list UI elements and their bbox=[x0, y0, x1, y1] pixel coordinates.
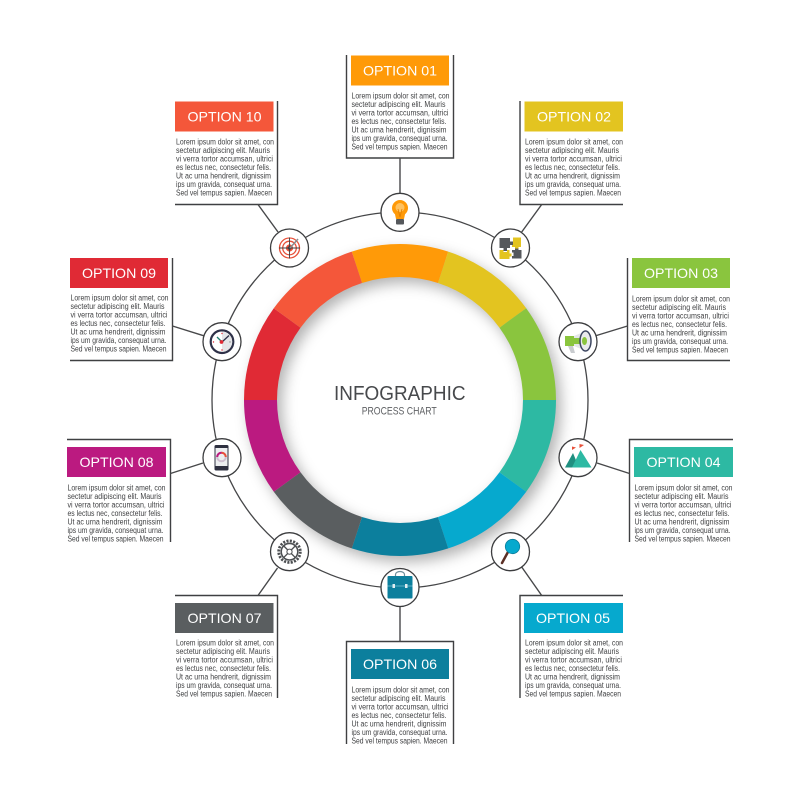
panel: option 06: Lorem ipsum dolor sit amet, con bbox=[352, 686, 450, 694]
panel: option 09: es lectus nec, consectetur felis. bbox=[70, 319, 166, 328]
panel: option 02: Ut ac urna hendrerit, dignissim bbox=[525, 172, 620, 180]
panel: option 02: Sed vel tempus sapien. Maecen bbox=[525, 188, 621, 198]
panel: option 04: Sed vel tempus sapien. Maecen bbox=[634, 534, 730, 544]
panel: option 03: Ut ac urna hendrerit, dignissim bbox=[632, 328, 727, 338]
panel: option 05: Ut ac urna hendrerit, dignissim bbox=[525, 672, 620, 682]
panel: option 05: sectetur adipiscing elit. Mauris bbox=[525, 647, 619, 656]
panel: option 04: vi verra tortor accumsan, ultrici bbox=[634, 500, 732, 510]
panel: option 07: OPTION 07 bbox=[188, 610, 262, 626]
panel: option 07: vi verra tortor accumsan, ultrici bbox=[176, 656, 273, 664]
centre subtitle: PROCESS CHART bbox=[362, 406, 437, 418]
panel: option 04 bbox=[597, 440, 733, 544]
panel: option 02: ips um gravida, consequat urna. bbox=[525, 180, 621, 189]
panel: option 08: OPTION 08 bbox=[80, 454, 154, 470]
ring drop shadow bbox=[266, 266, 544, 546]
panel: option 03: Lorem ipsum dolor sit amet, con bbox=[632, 294, 730, 304]
panel: option 08: es lectus nec, consectetur felis. bbox=[68, 509, 162, 518]
panel: option 02: Lorem ipsum dolor sit amet, con bbox=[525, 138, 623, 146]
panel: option 08: sectetur adipiscing elit. Mauris bbox=[68, 492, 162, 501]
panel: option 10: vi verra tortor accumsan, ultrici bbox=[176, 154, 273, 164]
panel: option 02: sectetur adipiscing elit. Mauris bbox=[525, 146, 619, 155]
panel: option 04: Ut ac urna hendrerit, dignissim bbox=[634, 518, 730, 526]
icon: puzzle bbox=[492, 229, 530, 267]
panel: option 07: ips um gravida, consequat urna. bbox=[176, 681, 272, 690]
panel: option 09: sectetur adipiscing elit. Mauris bbox=[70, 302, 165, 311]
panel: option 07: Sed vel tempus sapien. Maecen bbox=[176, 690, 272, 698]
panel: option 09: Lorem ipsum dolor sit amet, con bbox=[70, 294, 168, 302]
panel: option 04: sectetur adipiscing elit. Mauris bbox=[634, 492, 729, 501]
icon: light bulb bbox=[381, 193, 419, 231]
panel: option 05: es lectus nec, consectetur felis. bbox=[525, 664, 620, 673]
outer thin orbit circle bbox=[212, 212, 588, 588]
panel: option 05: OPTION 05 bbox=[536, 610, 610, 626]
panel: option 05: Sed vel tempus sapien. Maecen bbox=[525, 690, 621, 698]
panel: option 06: es lectus nec, consectetur felis. bbox=[352, 711, 446, 720]
icon: smartphone bbox=[203, 439, 241, 477]
panel: option 02: vi verra tortor accumsan, ultrici bbox=[525, 154, 622, 164]
panel: option 07: Ut ac urna hendrerit, dignissim bbox=[176, 672, 271, 682]
icon: briefcase bbox=[381, 568, 419, 606]
panel: option 10 bbox=[175, 101, 278, 232]
panel: option 01: ips um gravida, consequat urna. bbox=[352, 134, 448, 143]
panel: option 01: vi verra tortor accumsan, ultrici bbox=[352, 108, 449, 118]
panel: option 10: sectetur adipiscing elit. Mauris bbox=[176, 146, 270, 155]
panel: option 01: Ut ac urna hendrerit, dignissim bbox=[352, 126, 447, 134]
panel: option 07: sectetur adipiscing elit. Mauris bbox=[176, 647, 270, 656]
panel: option 08 bbox=[67, 440, 203, 544]
panel: option 03: ips um gravida, consequat urna. bbox=[632, 337, 728, 346]
panel: option 02: es lectus nec, consectetur felis. bbox=[525, 163, 620, 172]
panel: option 09: Ut ac urna hendrerit, dignissim bbox=[70, 328, 166, 336]
panel: option 01 bbox=[346, 55, 454, 193]
panel: option 06 bbox=[346, 607, 454, 746]
panel: option 08: Sed vel tempus sapien. Maecen bbox=[68, 534, 164, 544]
panel: option 09: OPTION 09 bbox=[82, 265, 156, 281]
icon: megaphone bbox=[559, 323, 597, 361]
panel: option 09: vi verra tortor accumsan, ultrici bbox=[70, 310, 168, 320]
panel: option 07: es lectus nec, consectetur felis. bbox=[176, 664, 271, 673]
panel: option 05: ips um gravida, consequat urna. bbox=[525, 681, 621, 690]
panel: option 05 bbox=[520, 567, 623, 698]
segmented colour ring bbox=[244, 244, 556, 556]
panel: option 04: ips um gravida, consequat urna. bbox=[634, 526, 730, 535]
panel: option 03: Sed vel tempus sapien. Maecen bbox=[632, 346, 728, 354]
panel: option 08: Lorem ipsum dolor sit amet, con bbox=[68, 484, 166, 492]
panel: option 08: Ut ac urna hendrerit, dignissim bbox=[68, 518, 163, 526]
panel: option 06: vi verra tortor accumsan, ultrici bbox=[352, 702, 449, 712]
panel: option 08: vi verra tortor accumsan, ultrici bbox=[68, 500, 165, 510]
panel: option 07 bbox=[175, 568, 278, 698]
panel: option 09 bbox=[70, 258, 204, 360]
panel: option 05: vi verra tortor accumsan, ultrici bbox=[525, 656, 622, 664]
panel: option 04: OPTION 04 bbox=[646, 454, 721, 470]
panel: option 03: sectetur adipiscing elit. Mauris bbox=[632, 303, 726, 312]
panel: option 01: Sed vel tempus sapien. Maecen bbox=[352, 142, 448, 152]
panel: option 03: vi verra tortor accumsan, ultrici bbox=[632, 312, 729, 320]
icon: clock bbox=[203, 323, 241, 361]
panel: option 01: sectetur adipiscing elit. Mauris bbox=[352, 100, 446, 109]
panel: option 02: OPTION 02 bbox=[537, 108, 611, 124]
panel: option 06: ips um gravida, consequat urna. bbox=[352, 728, 448, 737]
panel: option 07: Lorem ipsum dolor sit amet, con bbox=[176, 638, 274, 648]
panel: option 03: OPTION 03 bbox=[644, 265, 718, 281]
panel: option 06: Sed vel tempus sapien. Maecen bbox=[352, 736, 448, 746]
panel: option 03 bbox=[596, 258, 730, 360]
panel: option 10: ips um gravida, consequat urna. bbox=[176, 180, 272, 189]
panel: option 06: sectetur adipiscing elit. Mauris bbox=[352, 694, 446, 703]
panel: option 04: Lorem ipsum dolor sit amet, con bbox=[634, 484, 732, 492]
panel: option 06: OPTION 06 bbox=[363, 656, 437, 672]
panel: option 03: es lectus nec, consectetur felis. bbox=[632, 320, 727, 329]
panel: option 01: Lorem ipsum dolor sit amet, con bbox=[352, 92, 450, 100]
panel: option 10: Ut ac urna hendrerit, dignissim bbox=[176, 172, 271, 180]
icon: target bbox=[270, 229, 308, 267]
panel: option 08: ips um gravida, consequat urna. bbox=[68, 526, 164, 535]
panel: option 01: OPTION 01 bbox=[363, 62, 437, 78]
icon: gear bbox=[270, 533, 308, 571]
panel: option 10: Lorem ipsum dolor sit amet, con bbox=[176, 138, 274, 146]
panel: option 09: ips um gravida, consequat urna. bbox=[70, 336, 166, 345]
panel: option 10: Sed vel tempus sapien. Maecen bbox=[176, 188, 272, 198]
panel: option 02 bbox=[520, 101, 623, 232]
panel: option 05: Lorem ipsum dolor sit amet, con bbox=[525, 638, 623, 648]
panel: option 09: Sed vel tempus sapien. Maecen bbox=[70, 344, 166, 354]
panel: option 10: es lectus nec, consectetur felis. bbox=[176, 163, 271, 172]
panel: option 01: es lectus nec, consectetur felis. bbox=[352, 117, 446, 126]
panel: option 06: Ut ac urna hendrerit, dignissim bbox=[352, 720, 447, 728]
panel: option 04: es lectus nec, consectetur felis. bbox=[634, 509, 730, 518]
icon: magnifier bbox=[492, 533, 530, 571]
centre title: INFOGRAPHIC bbox=[334, 383, 466, 405]
icon: mountains with flags bbox=[559, 439, 597, 477]
panel: option 10: OPTION 10 bbox=[188, 108, 262, 124]
